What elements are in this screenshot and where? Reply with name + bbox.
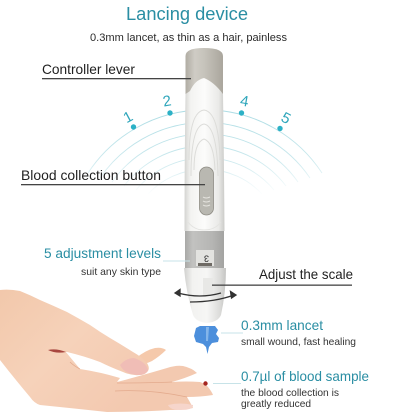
rotating tip — [184, 268, 226, 323]
hand — [0, 290, 213, 412]
scale window: 3 — [204, 254, 209, 264]
callout: 0.3mm lancet: 0.3mm lancet — [241, 317, 323, 333]
blood collection button — [200, 167, 214, 215]
callout: controller lever: Controller lever — [42, 61, 135, 77]
callout: blood sample: greatly reduced — [241, 398, 311, 410]
tip window — [203, 278, 213, 296]
fingernail — [120, 358, 148, 375]
adjustment arcs — [88, 110, 322, 194]
grey scale band — [185, 231, 224, 268]
callout: 5 adjustment levels — [44, 246, 190, 278]
callout: adjust the scale: Adjust the scale — [259, 266, 353, 282]
marker 5: 5 — [278, 109, 293, 128]
callout: blood collection button: Blood collection button — [21, 167, 161, 183]
callout: 0.3mm lancet — [221, 317, 356, 348]
marker 4: 4 — [239, 92, 250, 111]
blood drop — [203, 381, 208, 386]
callout: 5 adjustment levels: 5 adjustment levels — [44, 246, 161, 261]
cap / controller lever — [186, 48, 223, 94]
callout: blood sample — [213, 368, 369, 410]
callout: blood sample: 0.7µl of blood sample — [241, 368, 369, 384]
pen body — [184, 78, 224, 231]
lancet — [194, 326, 219, 354]
marker 1: 1 — [121, 108, 136, 127]
callout: 0.3mm lancet: small wound, fast healing — [241, 336, 356, 348]
palm and lower fingers — [0, 330, 213, 412]
callout: 5 adjustment levels: suit any skin type — [81, 266, 161, 278]
marker 2: 2 — [162, 92, 173, 111]
lower nail tip — [168, 404, 193, 410]
subtitle: 0.3mm lancet, as thin as a hair, painless — [90, 32, 287, 44]
title: Lancing device — [126, 4, 248, 24]
lancing device — [184, 48, 226, 323]
index finger and back of hand — [0, 290, 149, 375]
scale window — [196, 250, 214, 266]
finger crease — [48, 349, 66, 353]
back finger — [136, 348, 166, 365]
body contour lines — [188, 110, 221, 230]
callout: blood sample: the blood collection is — [241, 387, 339, 399]
lancet head — [194, 326, 219, 354]
finger separations — [70, 362, 187, 397]
level markers 1 to 5 — [121, 92, 293, 131]
rotation arrow — [175, 290, 236, 302]
